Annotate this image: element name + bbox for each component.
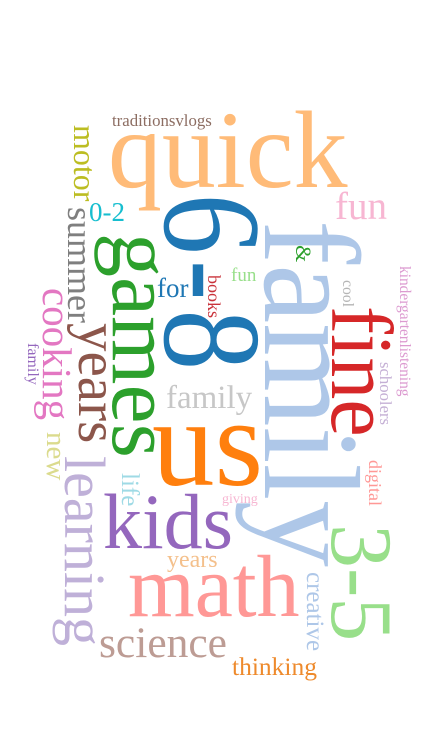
word: 6-8: 6 - 8 bbox=[134, 194, 289, 370]
word: fun green: fun bbox=[231, 265, 257, 286]
word: science: science bbox=[99, 619, 227, 667]
word: 3-5: 3-5 bbox=[312, 524, 409, 641]
word: books: books bbox=[204, 275, 224, 318]
word: digital: digital bbox=[365, 460, 385, 506]
word: family gray: family bbox=[166, 380, 253, 416]
word: creative: creative bbox=[301, 572, 328, 651]
word: life: life bbox=[116, 473, 143, 506]
word: kindergartenlistening: kindergartenlistening bbox=[396, 266, 413, 397]
word: fine: fine bbox=[313, 306, 411, 437]
word: for: for bbox=[157, 273, 188, 303]
word: math: math bbox=[128, 538, 300, 635]
word: thinking: thinking bbox=[232, 652, 317, 681]
word: giving: giving bbox=[222, 492, 258, 507]
word: fun pink: fun bbox=[335, 185, 387, 228]
word: ampersand: & bbox=[291, 245, 316, 262]
word: family small purple: family bbox=[24, 343, 41, 385]
word: years orange: years bbox=[167, 547, 218, 573]
word: new: new bbox=[40, 432, 72, 480]
word: motor: motor bbox=[67, 125, 103, 202]
word: learning: learning bbox=[52, 456, 117, 646]
word: traditionsvlogs: traditionsvlogs bbox=[112, 111, 212, 130]
word: schoolers: schoolers bbox=[376, 362, 395, 425]
word: kids: kids bbox=[103, 478, 233, 565]
word: summer: summer bbox=[60, 207, 100, 323]
word: years brown: years bbox=[66, 323, 129, 443]
word: games: games bbox=[93, 233, 190, 458]
word: family large: family bbox=[235, 220, 386, 567]
word: cooking: cooking bbox=[34, 288, 80, 420]
word: 0-2: 0-2 bbox=[89, 197, 125, 227]
word: us: us bbox=[152, 375, 263, 513]
word: cool: cool bbox=[339, 280, 356, 308]
word: quick: quick bbox=[108, 89, 348, 211]
